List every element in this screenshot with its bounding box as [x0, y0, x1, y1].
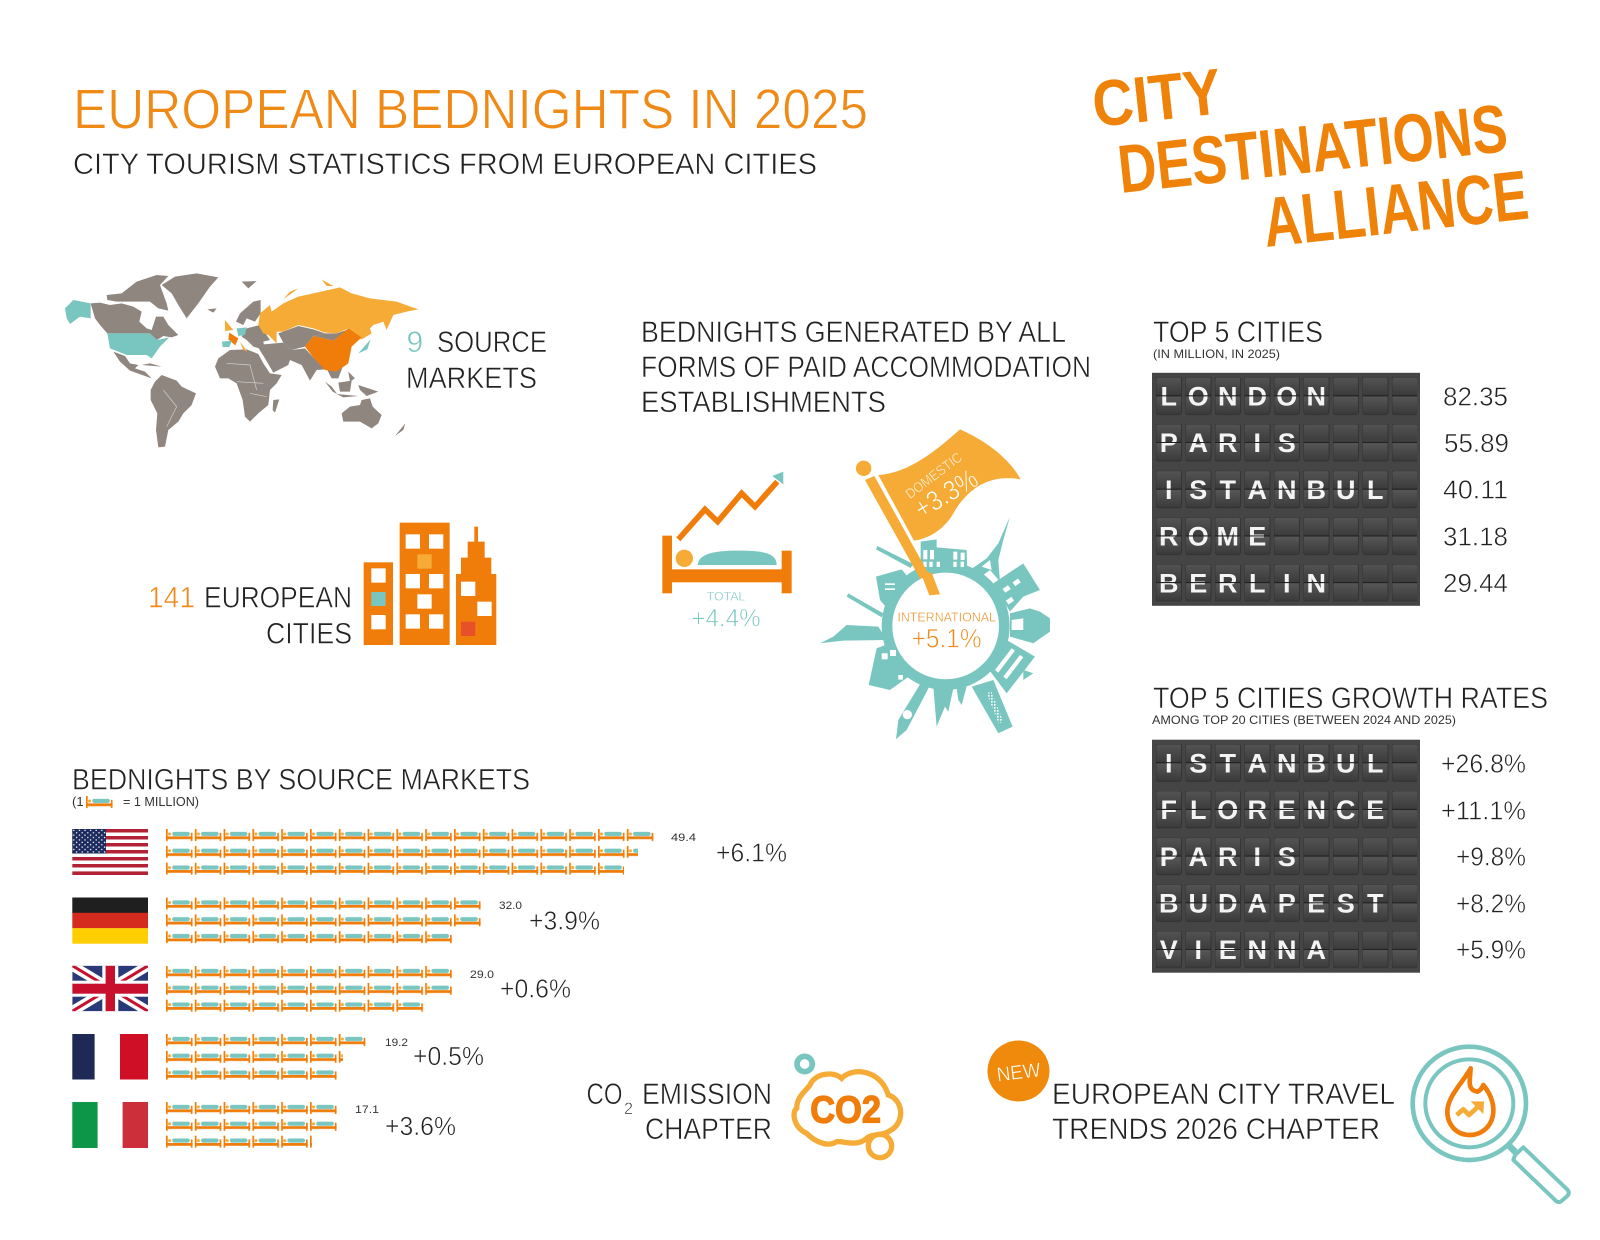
- bed rows: Germany: [166, 898, 482, 944]
- badge: NEW: NEW: [996, 1059, 1042, 1087]
- top 5 cities values: [1443, 382, 1509, 598]
- split-flap board: top 5 cities: ROME: [1159, 522, 1266, 552]
- world map: [65, 273, 418, 447]
- european cities label: CITIES: [266, 618, 352, 650]
- split-flap board: top 5 cities: [1152, 373, 1420, 606]
- source markets label: [406, 326, 547, 395]
- split-flap board: growth rates: PARIS: [1160, 842, 1296, 872]
- co2 emission chapter label: CO: [586, 1078, 622, 1111]
- travel trends chapter label: TRENDS 2026 CHAPTER: [1052, 1113, 1380, 1146]
- growth rate values: +9.8%: [1456, 842, 1526, 872]
- row: Germany: +3.9%: [529, 906, 600, 936]
- heading: top 5 cities: [1153, 316, 1323, 361]
- flag: Italy: [72, 1102, 148, 1148]
- source markets label: MARKETS: [406, 362, 537, 395]
- european cities label: 141: [148, 582, 195, 614]
- heading: growth rates: AMONG TOP 20 CITIES (BETWEEN 2024 AND 2025): [1152, 713, 1456, 727]
- bed rows: France: [166, 1034, 367, 1081]
- bed rows: UK: [166, 966, 453, 1013]
- icon: CO2 cloud: [794, 1056, 901, 1158]
- heading: top 5 cities: TOP 5 CITIES: [1153, 316, 1323, 349]
- growth rate values: +11.1%: [1441, 796, 1526, 826]
- growth rate values: +5.9%: [1456, 934, 1526, 964]
- heading: bednights by source markets: = 1 MILLION): [123, 794, 199, 809]
- heading: bednights by source markets: [72, 764, 530, 809]
- icon: globe of landmarks with flag: [820, 429, 1050, 739]
- row: UK: [72, 966, 571, 1013]
- top 5 cities values: 55.89: [1444, 428, 1509, 458]
- heading: bednights by source markets: BEDNIGHTS BY SOURCE MARKETS: [72, 764, 530, 796]
- split-flap board: growth rates: BUDAPEST: [1159, 889, 1384, 919]
- row: Germany: [72, 898, 600, 944]
- growth rate values: +8.2%: [1456, 888, 1526, 918]
- travel trends chapter label: EUROPEAN CITY TRAVEL: [1052, 1078, 1395, 1111]
- trend arrow: [1457, 1101, 1484, 1115]
- icon: CO2 cloud: CO2: [810, 1089, 881, 1131]
- growth rate values: +26.8%: [1441, 748, 1526, 778]
- top 5 cities values: 82.35: [1443, 382, 1508, 412]
- row: Italy: [72, 1102, 456, 1149]
- logo: City Destinations Alliance: CITY: [1089, 54, 1225, 141]
- heading: bednights generated: FORMS OF PAID ACCOMMODATION: [641, 351, 1091, 384]
- split-flap board: growth rates: FLORENCE: [1160, 795, 1384, 825]
- european cities label: [148, 582, 352, 650]
- heading: bednights generated: BEDNIGHTS GENERATED BY ALL: [641, 316, 1066, 349]
- circle: international: +5.1%: [912, 623, 982, 653]
- source markets label: SOURCE: [437, 326, 547, 359]
- flame: [1447, 1068, 1493, 1135]
- split-flap board: top 5 cities: PARIS: [1160, 428, 1296, 458]
- split-flap board: growth rates: VIENNA: [1160, 935, 1326, 965]
- heading: growth rates: [1152, 682, 1548, 727]
- heading: growth rates: TOP 5 CITIES GROWTH RATES: [1153, 682, 1548, 715]
- icon: bed with rising arrow, total: [662, 472, 792, 633]
- flag: France: [72, 1034, 148, 1080]
- flag: UK: [72, 966, 148, 1011]
- split-flap board: growth rates: ISTANBUL: [1165, 748, 1384, 778]
- flag: [856, 429, 1021, 595]
- row: France: 19.2: [385, 1037, 408, 1049]
- travel trends chapter label: [1052, 1078, 1395, 1146]
- row: UK: 29.0: [470, 969, 494, 981]
- row: Germany: 32.0: [499, 900, 522, 912]
- flag: DOMESTIC: [902, 449, 965, 502]
- growth rate values: [1441, 748, 1526, 964]
- source markets label: 9: [406, 326, 423, 359]
- icon: bed with rising arrow, total: +4.4%: [691, 605, 761, 633]
- row: France: +0.5%: [413, 1041, 484, 1071]
- row: France: [72, 1034, 484, 1081]
- badge: NEW: [988, 1040, 1050, 1102]
- circle: international: INTERNATIONAL: [897, 611, 996, 625]
- heading: top 5 cities: (IN MILLION, IN 2025): [1153, 347, 1280, 361]
- icon: bed with rising arrow, total: TOTAL: [707, 590, 745, 604]
- icon: magnifier with flame: [1413, 1047, 1569, 1202]
- flag: USA: [72, 829, 148, 875]
- co2 emission chapter label: 2: [624, 1099, 633, 1118]
- european cities label: EUROPEAN: [204, 582, 352, 614]
- split-flap board: growth rates: [1152, 740, 1420, 973]
- flag: +3.3%: [909, 463, 983, 524]
- flag: Germany: [72, 898, 148, 944]
- co2 emission chapter label: [586, 1078, 772, 1146]
- logo: City Destinations Alliance: [1089, 54, 1532, 262]
- row: USA: [72, 829, 787, 876]
- co2 emission chapter label: CHAPTER: [645, 1113, 772, 1146]
- heading: bednights generated: ESTABLISHMENTS: [641, 386, 886, 419]
- row: Italy: 17.1: [355, 1104, 379, 1116]
- subtitle: CITY TOURISM STATISTICS FROM EUROPEAN CITIES: [73, 148, 817, 181]
- bed rows: Italy: [166, 1102, 338, 1149]
- title: EUROPEAN BEDNIGHTS IN 2025: [73, 78, 868, 142]
- bed rows: USA: [166, 829, 655, 876]
- row: USA: +6.1%: [716, 838, 787, 868]
- split-flap board: top 5 cities: ISTANBUL: [1165, 475, 1384, 505]
- icon: city buildings: [364, 523, 496, 645]
- top 5 cities values: 31.18: [1443, 522, 1508, 552]
- heading: bednights generated: [641, 316, 1091, 419]
- row: USA: 49.4: [671, 832, 696, 844]
- heading: bednights by source markets: (1: [72, 794, 84, 809]
- split-flap board: top 5 cities: LONDON: [1160, 381, 1326, 411]
- row: Italy: +3.6%: [385, 1111, 456, 1141]
- split-flap board: top 5 cities: BERLIN: [1159, 568, 1326, 598]
- top 5 cities values: 40.11: [1443, 474, 1508, 504]
- co2 emission chapter label: EMISSION: [642, 1078, 772, 1111]
- circle: international: [892, 573, 999, 679]
- row: UK: +0.6%: [500, 974, 571, 1004]
- top 5 cities values: 29.44: [1443, 568, 1508, 598]
